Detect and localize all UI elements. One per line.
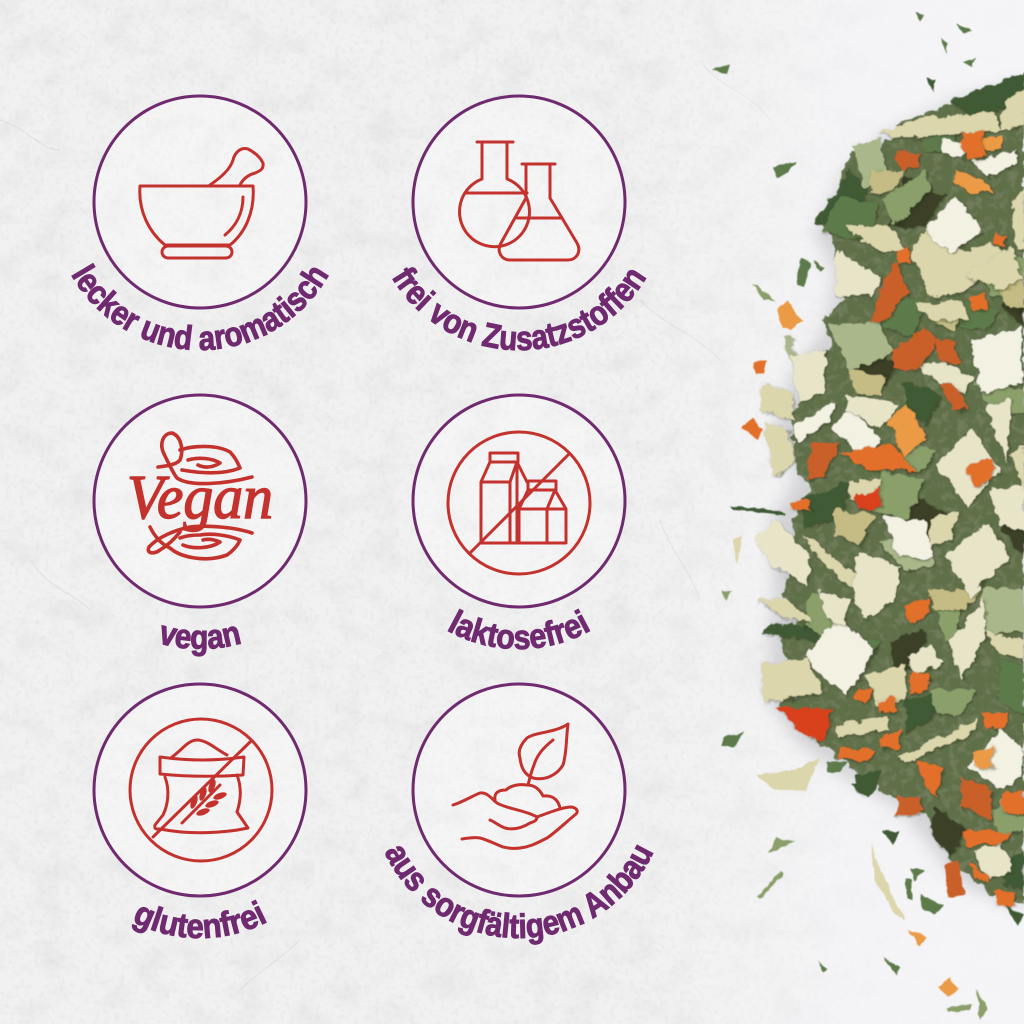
panel: glutenfrei [92,682,308,939]
photo: pile of dried vegetables [712,12,1024,1020]
panel: aus sorgfaeltigem Anbau [385,682,654,945]
loose fragments [712,12,1024,1020]
badge ring [413,684,625,896]
panel: frei von Zusatzstoffen [392,94,646,351]
panel: laktosefrei [412,394,626,650]
panel: lecker und aromatisch [71,94,329,351]
icon: vegan script lettering with leaves [127,433,273,559]
label: glutenfrei [132,900,267,939]
badge ring [94,684,306,896]
icon: hand holding seedling [453,724,577,848]
label: aus sorgfältigem Anbau [385,844,654,945]
icon: mortar and pestle [140,149,263,258]
label: frei von Zusatzstoffen [392,267,646,351]
badge ring [413,395,625,607]
label: laktosefrei [448,608,590,650]
icon: crossed-out flour sack with wheat [130,719,272,861]
icon: vegan script lettering with leaves: Vegan [127,464,273,532]
icon: crossed-out milk cartons [448,432,590,574]
badge ring [94,96,306,308]
label: vegan [161,624,242,657]
panel: vegan [92,394,308,657]
badge ring [413,96,625,308]
label: lecker und aromatisch [71,262,329,351]
badge ring [94,395,306,607]
icon: laboratory flasks [460,142,579,260]
